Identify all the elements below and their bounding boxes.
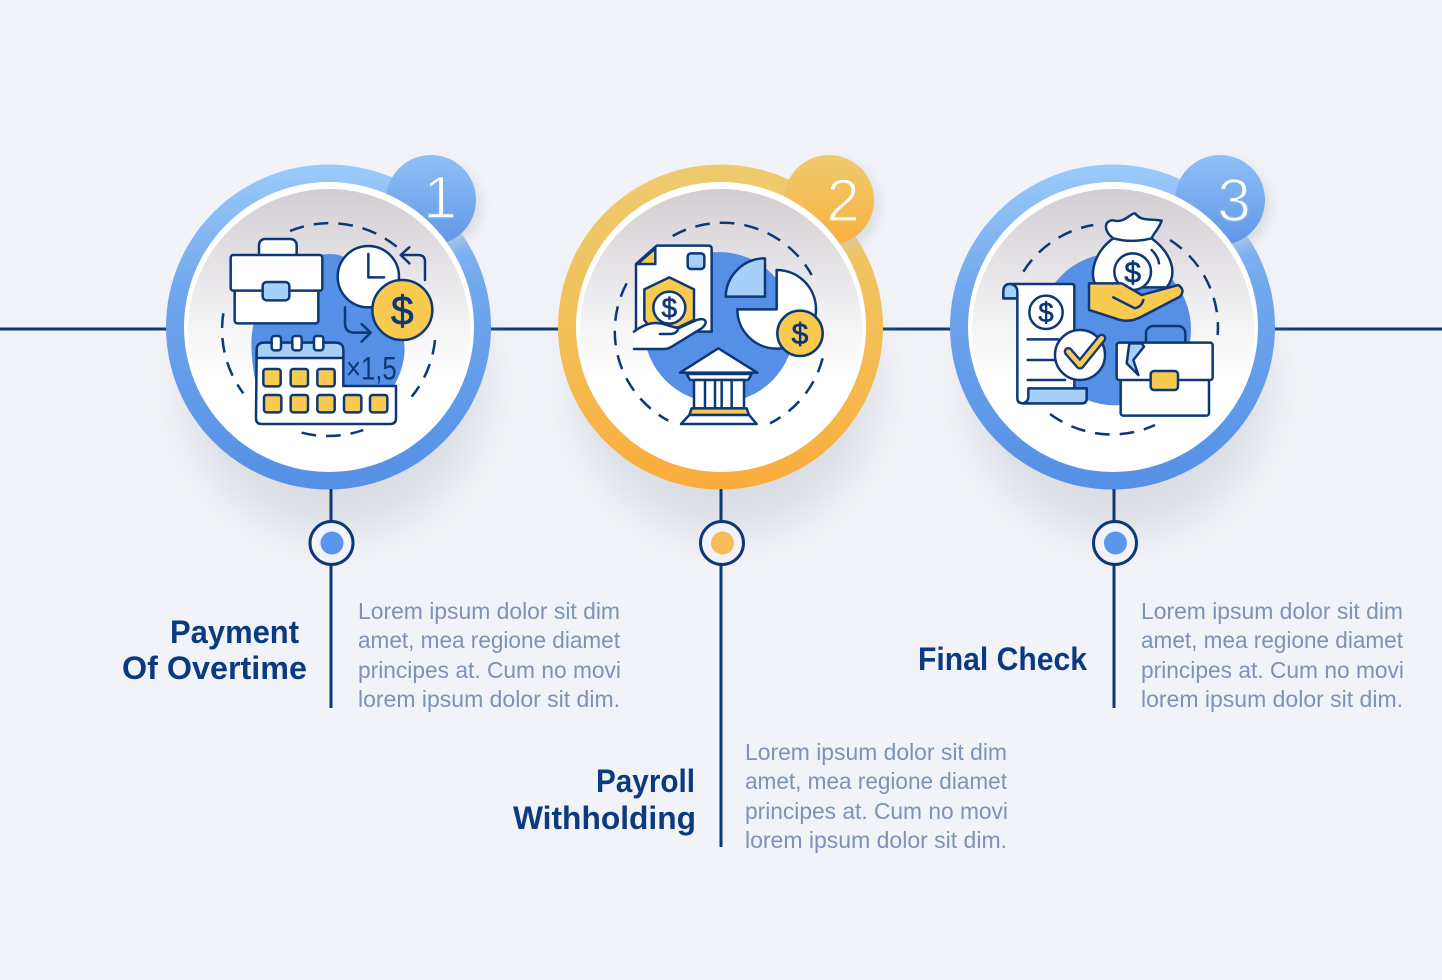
step 3 number badge: 3 — [1217, 167, 1251, 234]
step 2 body text: lorem ipsum dolor sit dim. — [745, 827, 1007, 853]
step 1 body text — [358, 598, 621, 712]
step 2 ring — [558, 164, 883, 490]
step 1 heading: Of Overtime — [122, 650, 307, 686]
icon: final check: $ — [1038, 297, 1054, 328]
step 2 body text — [745, 739, 1008, 853]
step 3 shadow — [969, 235, 1269, 535]
step 3 body text: lorem ipsum dolor sit dim. — [1141, 686, 1403, 712]
icon: payroll withholding: $ — [662, 293, 678, 324]
step 2 inner disc — [576, 182, 866, 472]
step 1 heading: Payment — [170, 614, 299, 650]
step 3 body text: amet, mea regione diamet — [1141, 627, 1404, 653]
icon: payroll withholding — [615, 223, 823, 424]
step 2 number badge: 2 — [826, 167, 860, 234]
step 3 body text: principes at. Cum no movi — [1141, 657, 1404, 683]
step 1 number badge — [386, 155, 481, 250]
panel: step 3 Final Check — [918, 155, 1404, 712]
step 3 stem and node — [1094, 489, 1136, 708]
step 2 heading: Payroll — [596, 763, 695, 799]
step 2 shadow — [577, 235, 877, 535]
step 3 heading: Final Check — [918, 641, 1087, 677]
step 2 body text: Lorem ipsum dolor sit dim — [745, 739, 1007, 765]
icon: overtime pay — [222, 223, 435, 436]
step 2 body text: amet, mea regione diamet — [745, 768, 1008, 794]
icon: payroll withholding: $ — [792, 318, 809, 351]
step 3 body text: Lorem ipsum dolor sit dim — [1141, 598, 1403, 624]
step 2 heading — [513, 763, 696, 836]
step 2 number badge — [784, 155, 879, 250]
step 3 number badge — [1175, 155, 1270, 250]
icon: overtime pay: ×1,5 — [346, 349, 397, 386]
step 3 inner disc — [968, 182, 1258, 472]
panel: step 2 Payroll Withholding — [513, 155, 1008, 853]
step 1 body text: principes at. Cum no movi — [358, 657, 621, 683]
step 1 body text: lorem ipsum dolor sit dim. — [358, 686, 620, 712]
step 1 shadow — [185, 235, 485, 535]
step 1 heading — [122, 614, 307, 686]
step 2 stem and node — [700, 489, 744, 847]
step 1 inner disc — [184, 182, 474, 472]
icon: overtime pay: $ — [391, 288, 414, 334]
step 1 body text: amet, mea regione diamet — [358, 627, 621, 653]
step 2 heading: Withholding — [513, 800, 696, 836]
step 1 stem and node — [310, 489, 353, 708]
icon: final check: $ — [1124, 256, 1141, 289]
panel: step 1 Payment Of Overtime — [122, 155, 621, 712]
icon: final check — [1003, 213, 1218, 434]
step 1 body text: Lorem ipsum dolor sit dim — [358, 598, 620, 624]
step 3 body text — [1141, 598, 1404, 712]
timeline: horizontal connector — [0, 328, 1442, 330]
step 1 ring — [166, 164, 491, 490]
step 3 ring — [950, 164, 1275, 490]
step 1 number badge: 1 — [423, 164, 457, 231]
step 2 body text: principes at. Cum no movi — [745, 798, 1008, 824]
